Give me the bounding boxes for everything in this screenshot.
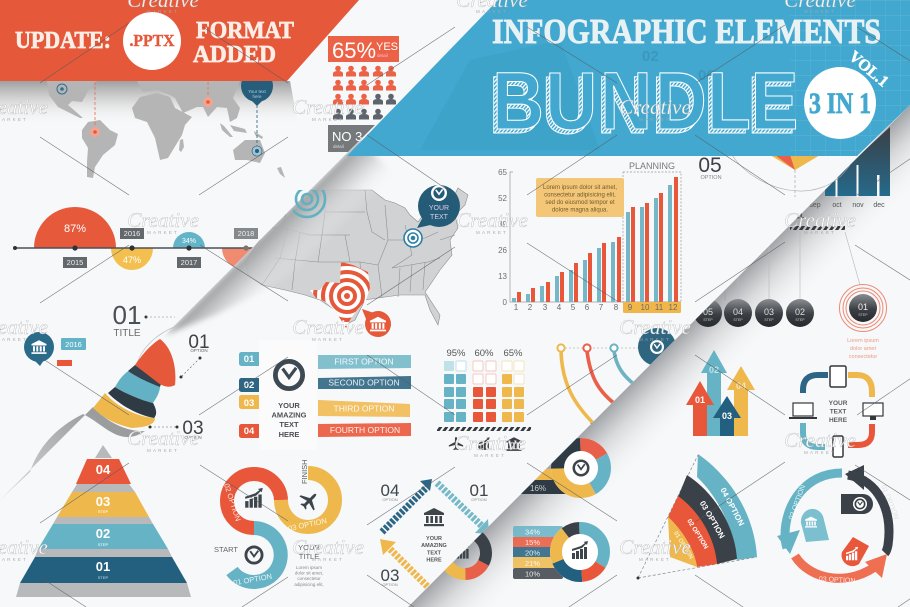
pyramid level 04: 04 bbox=[96, 462, 111, 477]
pyramid level 04 bbox=[76, 459, 131, 484]
ghost numbers: 06 bbox=[698, 67, 715, 84]
cell headings: 60% bbox=[474, 348, 494, 359]
cell icons bbox=[449, 437, 522, 451]
title 01 bbox=[113, 300, 175, 339]
world map continents bbox=[47, 81, 285, 178]
fan labels bbox=[672, 486, 746, 560]
panel: USA map bbox=[245, 185, 468, 337]
yes header: YES bbox=[376, 41, 398, 53]
map pin markers bbox=[57, 82, 262, 156]
strip navy top bbox=[128, 365, 161, 387]
watermarks: MARKET bbox=[147, 9, 179, 14]
fan segment 03 bbox=[678, 475, 737, 564]
planning label: PLANNING bbox=[629, 161, 675, 171]
state map bbox=[245, 188, 468, 325]
timeline year tags: 2015 bbox=[67, 258, 83, 267]
diamond labels bbox=[381, 481, 488, 587]
card text: YOUR bbox=[278, 401, 300, 410]
cells red bbox=[473, 361, 496, 422]
panel: diamond arrows bbox=[380, 479, 489, 589]
curved lines: title: H bbox=[603, 411, 608, 420]
timeline percent labels bbox=[64, 223, 196, 265]
bundle face: BUNDLE bbox=[492, 55, 798, 147]
arc labels: 03 OPTION bbox=[287, 516, 328, 533]
3 in 1 badge bbox=[804, 67, 876, 139]
fan segment 02 bbox=[668, 496, 717, 567]
pyramid level 03 bbox=[57, 492, 149, 517]
road icons bbox=[245, 487, 323, 563]
arc labels: 02 OPTION bbox=[222, 482, 243, 522]
fan segment 01 bbox=[668, 517, 697, 567]
devices loop bbox=[789, 366, 883, 457]
donut lower with table bbox=[513, 522, 610, 582]
hazard bar bbox=[437, 427, 531, 431]
x labels: 3 bbox=[543, 303, 548, 312]
phone bbox=[833, 436, 843, 457]
hazard label 04: 04 bbox=[781, 204, 805, 227]
panel: 05 option: 05 bbox=[698, 154, 722, 177]
panel: options list bbox=[239, 340, 411, 450]
x labels: 4 bbox=[557, 303, 562, 312]
card text: AMAZING bbox=[272, 410, 307, 420]
banner: red update bbox=[0, 0, 359, 81]
loop text: HERE bbox=[829, 417, 848, 424]
timeline year tags: 2016 bbox=[124, 229, 140, 238]
panel: 05 option: OPTION bbox=[700, 175, 722, 181]
timeline percent labels: 87% bbox=[64, 223, 86, 235]
fan labels: 03 OPTION bbox=[698, 499, 727, 540]
month labels: nov bbox=[852, 202, 864, 209]
pptx badge bbox=[123, 12, 181, 70]
axis values: 65 bbox=[498, 168, 508, 177]
your title bbox=[298, 543, 320, 561]
blueprint grid bbox=[790, 0, 910, 156]
title 01: 01 bbox=[113, 300, 141, 330]
cell headings bbox=[446, 348, 523, 359]
diamond text: AMAZING bbox=[421, 543, 447, 549]
stacked arrows: 01 bbox=[695, 395, 705, 405]
yes header: 65% bbox=[332, 38, 376, 63]
teal target bbox=[293, 190, 326, 218]
timeline percent labels: 34% bbox=[182, 238, 196, 245]
red bars bbox=[517, 177, 678, 302]
panel: 05 option bbox=[698, 154, 850, 197]
fan segment 04 bbox=[697, 454, 757, 560]
watermarks: MARKET bbox=[804, 230, 836, 235]
step balls bbox=[694, 299, 814, 327]
bundle hatch: BUNDLE bbox=[489, 59, 795, 151]
x labels: 6 bbox=[585, 303, 590, 312]
year tag: 2016 bbox=[65, 340, 82, 349]
timeline percent labels: 47% bbox=[123, 255, 141, 265]
no header: NO 3 bbox=[332, 129, 362, 144]
panel: percent cells bbox=[437, 348, 531, 451]
curved lines: title: TLE bbox=[590, 421, 604, 430]
arc labels: 01 OPTION bbox=[879, 484, 899, 521]
pale circle bbox=[263, 204, 296, 237]
panel: bar chart bbox=[498, 161, 681, 313]
tablet bbox=[830, 366, 846, 387]
callout: your text bbox=[417, 185, 460, 228]
pyramid level 02: STEP bbox=[98, 542, 109, 547]
month labels: sep bbox=[809, 202, 821, 209]
center red bell bbox=[842, 537, 869, 566]
watermarks: MARKET bbox=[312, 117, 344, 122]
cells yellow bbox=[502, 361, 524, 422]
laptop bbox=[789, 403, 817, 419]
diamond text: TEXT bbox=[427, 550, 442, 556]
watermarks: MARKET bbox=[474, 453, 506, 458]
step balls: STEP bbox=[733, 318, 743, 322]
watermarks: MARKET bbox=[147, 230, 179, 235]
navy map callout bbox=[241, 70, 273, 106]
step balls: STEP bbox=[764, 318, 774, 322]
watermarks: MARKET bbox=[639, 557, 671, 562]
panel: bank pin tags bbox=[24, 332, 86, 366]
step axis 60 bbox=[724, 290, 726, 300]
navy map callout: here bbox=[252, 94, 262, 99]
step balls: 02 bbox=[795, 307, 805, 317]
panel: timeline bbox=[13, 207, 270, 270]
option tabs bbox=[239, 352, 261, 438]
pyramid level 01 bbox=[20, 557, 187, 583]
axis values: 0 bbox=[503, 298, 508, 307]
watermarks: Creative bbox=[784, 428, 856, 452]
timeline percent semicircles bbox=[34, 207, 270, 270]
option 01 bbox=[180, 332, 210, 378]
x labels: 8 bbox=[614, 303, 619, 312]
timeline year tags: 2017 bbox=[181, 258, 197, 267]
center teal bell bbox=[801, 509, 829, 542]
watermarks: MARKET bbox=[312, 337, 344, 342]
step 01 target: STEP bbox=[858, 313, 868, 317]
card clock bbox=[275, 361, 303, 389]
donut upper with bars bbox=[515, 438, 611, 498]
stacked arrows: 03 bbox=[722, 411, 732, 421]
panel: 65 percent people chart bbox=[328, 36, 399, 152]
dark arc bbox=[845, 465, 889, 553]
pyramid level 02 bbox=[38, 524, 168, 549]
donut lower with table: 10% bbox=[525, 570, 540, 578]
teal bars bbox=[512, 185, 672, 302]
donut small bbox=[444, 532, 486, 574]
watermarks: Creative bbox=[292, 95, 364, 119]
loop connectors bbox=[803, 375, 872, 447]
fan labels: 01 OPTION bbox=[672, 531, 694, 560]
option 03: 03 bbox=[182, 418, 204, 439]
callout: your text: YOUR bbox=[429, 205, 449, 212]
no header bbox=[328, 125, 388, 152]
watermarks: Creative bbox=[619, 535, 691, 559]
format word: FORMAT bbox=[196, 18, 294, 44]
month labels: dec bbox=[873, 202, 885, 209]
step 01 target: 01 bbox=[858, 302, 868, 312]
pyramid level 01: 01 bbox=[96, 559, 110, 574]
watermarks: MARKET bbox=[476, 230, 508, 235]
center dark pill bbox=[841, 494, 873, 514]
diamond labels: 03 bbox=[381, 566, 399, 585]
step 01 text: dolor amet bbox=[850, 346, 876, 352]
panel: lower band content bbox=[444, 127, 899, 585]
note box: consectetur adipisicing elit, bbox=[544, 192, 616, 198]
option ribbons bbox=[318, 355, 411, 437]
fan guide lines bbox=[638, 455, 757, 578]
x labels: 2 bbox=[528, 303, 533, 312]
banner: blue bundle bbox=[347, 0, 910, 156]
arc labels bbox=[222, 482, 328, 587]
your title: YOUR bbox=[298, 543, 320, 552]
panel: S-curve roadmap bbox=[214, 459, 335, 587]
x labels: 1 bbox=[514, 303, 519, 312]
panel: folded rocket strip bbox=[93, 300, 210, 440]
watermarks: MARKET bbox=[639, 337, 671, 342]
fold shadow: lower bbox=[408, 105, 910, 607]
navy arrow bbox=[382, 479, 432, 532]
pyramid level 01: STEP bbox=[98, 575, 109, 580]
fold shadow: upper bbox=[165, 140, 400, 335]
note box bbox=[536, 178, 624, 217]
watermarks: Creative bbox=[292, 535, 364, 559]
donut lower with table: 20% bbox=[525, 548, 540, 558]
yes header bbox=[328, 36, 399, 63]
donut lower with table: 15% bbox=[525, 538, 540, 547]
diamond text: YOUR bbox=[426, 536, 442, 542]
callout: your text: TEXT bbox=[430, 214, 449, 221]
x labels: 12 bbox=[669, 303, 678, 312]
fan labels: 02 OPTION bbox=[685, 518, 709, 551]
strip teal bbox=[115, 370, 160, 403]
dark bar chart bbox=[825, 127, 890, 197]
timeline nodes bbox=[13, 245, 249, 251]
option 01: OPTION bbox=[190, 348, 208, 353]
hazard label 04 bbox=[790, 213, 845, 230]
ghost numbers: 02 bbox=[642, 48, 659, 65]
option ribbons: FOURTH OPTION bbox=[330, 425, 400, 435]
card text bbox=[272, 401, 307, 439]
watermarks: MARKET bbox=[804, 9, 836, 14]
strip red cap bbox=[135, 339, 175, 387]
fan chart bbox=[636, 454, 757, 580]
teal arrow bbox=[437, 483, 489, 534]
step axis 60: 60 bbox=[714, 258, 723, 267]
pyramid level 03: STEP bbox=[98, 509, 109, 514]
cell headings: 65% bbox=[503, 348, 523, 359]
stacked arrows: 02 bbox=[709, 365, 719, 375]
step balls: 05 bbox=[703, 307, 713, 317]
teal arc bbox=[232, 528, 281, 582]
lorem text: dolor sit amet, bbox=[295, 570, 323, 576]
cells teal bbox=[444, 361, 466, 422]
option tabs: 01 bbox=[244, 354, 255, 365]
panel: lower band bbox=[408, 105, 910, 607]
watermarks: Creative bbox=[454, 431, 526, 455]
loop text: TEXT bbox=[830, 408, 846, 416]
note box: Lorem ipsum dolor sit amet, bbox=[543, 185, 617, 191]
vol 1: VOL.1 bbox=[845, 48, 892, 91]
step balls: STEP bbox=[703, 318, 713, 322]
pyramid level 04: STEP bbox=[98, 477, 109, 482]
yellow arrow bbox=[380, 539, 430, 589]
x labels: 10 bbox=[641, 303, 650, 312]
watermarks: Creative bbox=[456, 208, 528, 232]
step 01 text: Lorem ipsum bbox=[847, 338, 879, 344]
lorem text: Lorem ipsum bbox=[296, 565, 322, 570]
diamond labels: OPTION bbox=[471, 497, 487, 502]
pyramid level 03: 03 bbox=[96, 494, 110, 509]
bank pin bbox=[24, 332, 54, 366]
finish label: FINISH bbox=[300, 459, 309, 484]
axis values: 26 bbox=[498, 246, 508, 255]
planning frame bbox=[623, 172, 681, 302]
fold crescent: curl bbox=[0, 407, 145, 500]
diamond labels: 01 bbox=[470, 481, 488, 500]
timeline year tags bbox=[63, 228, 258, 268]
callout: red bank pin bbox=[362, 309, 391, 337]
lorem text: adipisicing elit, bbox=[294, 582, 324, 587]
option tabs: 04 bbox=[244, 426, 255, 437]
red tag bbox=[57, 360, 72, 366]
lorem text bbox=[294, 565, 324, 587]
arc labels: 03 OPTION bbox=[819, 576, 856, 585]
start label: START bbox=[214, 545, 238, 554]
monitor bbox=[863, 403, 883, 420]
red arc bbox=[795, 554, 887, 578]
watermarks: Creative bbox=[127, 426, 199, 450]
step stems bbox=[738, 232, 860, 299]
diamond text: HERE bbox=[426, 558, 442, 564]
fan labels: 04 OPTION bbox=[718, 486, 746, 528]
x labels: 9 bbox=[628, 303, 633, 312]
your title: TITLE bbox=[299, 552, 319, 561]
note box: dolore magna aliqua. bbox=[552, 208, 608, 214]
watermarks: Creative bbox=[292, 315, 364, 339]
ghost numbers bbox=[642, 48, 715, 84]
option ribbons: SECOND OPTION bbox=[328, 378, 400, 388]
timeline year tags: 2018 bbox=[238, 229, 254, 238]
option tabs: 02 bbox=[244, 380, 254, 391]
people icons bbox=[333, 66, 396, 120]
step 01 text: consectetur bbox=[849, 354, 877, 360]
pyramid grey steps bbox=[16, 445, 191, 597]
card text: HERE bbox=[279, 430, 299, 439]
timeline axis bbox=[15, 247, 260, 249]
donut lower with table: 34% bbox=[525, 528, 540, 536]
curl outline bbox=[137, 326, 176, 363]
curved lines: title bbox=[557, 328, 676, 430]
circular arrows bbox=[777, 465, 899, 585]
donut lower with table: 21% bbox=[525, 559, 540, 568]
pyramid level 02: 02 bbox=[96, 526, 110, 541]
step balls: 03 bbox=[764, 307, 774, 317]
title 01: TITLE bbox=[113, 328, 141, 339]
diamond text bbox=[421, 536, 447, 564]
watermarks: MARKET bbox=[476, 9, 508, 14]
watermarks: MARKET bbox=[639, 117, 671, 122]
diamond bank icon bbox=[424, 508, 444, 526]
step 01 text bbox=[848, 338, 878, 358]
cell headings: 95% bbox=[446, 348, 466, 359]
yellow arc bbox=[281, 473, 335, 527]
x band bbox=[623, 302, 681, 313]
axis values bbox=[498, 168, 508, 307]
step balls: STEP bbox=[795, 318, 805, 322]
blue target bbox=[404, 229, 422, 247]
note box: sed do eiusmod tempor et bbox=[545, 200, 615, 206]
axis values: 13 bbox=[498, 272, 508, 281]
teal arc bbox=[777, 473, 842, 554]
red arc bbox=[227, 474, 281, 528]
arc labels bbox=[788, 484, 899, 585]
Texas target bbox=[310, 262, 370, 328]
watermarks: Creative bbox=[127, 208, 199, 232]
x labels: 11 bbox=[655, 303, 664, 312]
navy map callout: Your text bbox=[248, 89, 267, 94]
axis bbox=[510, 172, 681, 302]
month labels bbox=[809, 202, 885, 209]
arc labels: 02 OPTION bbox=[788, 484, 807, 521]
diamond labels: OPTION bbox=[382, 582, 398, 587]
3 in 1 badge: 3 IN 1 bbox=[809, 87, 871, 120]
no header: detail bbox=[333, 144, 344, 149]
watermarks: MARKET bbox=[312, 557, 344, 562]
month labels: oct bbox=[832, 202, 842, 209]
step balls: 04 bbox=[733, 307, 743, 317]
fan apex bbox=[636, 576, 640, 580]
pptx badge: .PPTX bbox=[130, 31, 175, 50]
watermarks: MARKET bbox=[804, 450, 836, 455]
x labels bbox=[514, 303, 678, 312]
watermarks: MARKET bbox=[147, 448, 179, 453]
axis values: 52 bbox=[498, 194, 508, 203]
lorem text: consectetur bbox=[297, 576, 321, 581]
ghost shapes bbox=[420, 40, 600, 150]
option ribbons: FIRST OPTION bbox=[334, 356, 394, 366]
watermarks: Creative bbox=[619, 95, 691, 119]
step 01 target bbox=[840, 284, 886, 332]
card text: TEXT bbox=[279, 420, 299, 429]
center card bbox=[259, 340, 317, 450]
option 01: 01 bbox=[188, 332, 210, 353]
option 03: OPTION bbox=[184, 435, 202, 440]
diamond labels: 04 bbox=[381, 481, 399, 500]
option tabs: 03 bbox=[244, 398, 254, 409]
strip navy mid bbox=[108, 387, 156, 418]
stacked arrows: 04 bbox=[736, 381, 746, 391]
strip yellow bbox=[93, 393, 155, 428]
loop text: YOUR bbox=[829, 400, 848, 407]
option 03 bbox=[148, 418, 204, 440]
yes header: detail bbox=[377, 53, 388, 58]
panel: pyramid bbox=[16, 445, 191, 597]
panel: world map bbox=[0, 70, 298, 178]
stacked arrows bbox=[686, 350, 755, 436]
watermarks: Creative bbox=[619, 315, 691, 339]
loop text bbox=[828, 400, 848, 422]
donut upper with bars: 16% bbox=[530, 484, 546, 493]
watermarks: Creative bbox=[784, 208, 856, 232]
update word: UPDATE: bbox=[15, 28, 111, 54]
added word: ADDED bbox=[193, 42, 276, 68]
option ribbons: THIRD OPTION bbox=[334, 404, 394, 414]
diamond labels: OPTION bbox=[382, 497, 398, 502]
axis values: 39 bbox=[498, 220, 508, 229]
x labels: 5 bbox=[571, 303, 576, 312]
x labels: 7 bbox=[599, 303, 604, 312]
arc labels: 01 OPTION bbox=[232, 572, 273, 587]
